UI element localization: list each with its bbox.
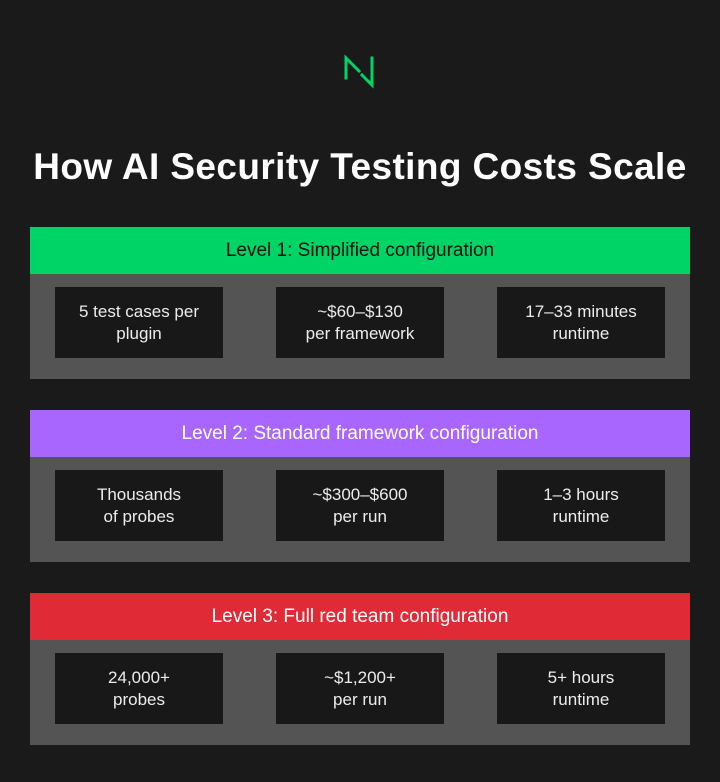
panel: level 2: [30, 410, 690, 562]
box: cost: ~$1,200+: [324, 668, 396, 686]
box: cost: per run: [333, 506, 387, 526]
box: probes: [55, 653, 223, 724]
box: probes: Thousands: [97, 484, 181, 504]
box: runtime: [497, 470, 665, 541]
box: cost: [276, 470, 444, 541]
box: cost: per run: [333, 690, 387, 708]
box: runtime: runtime: [553, 324, 609, 342]
box: probes: of probes: [104, 506, 174, 526]
level 3 header: Level 3: Full red team configuration: [212, 606, 508, 626]
level 1 header: [30, 227, 690, 274]
level 2 header: [30, 410, 690, 457]
box: probes: [55, 470, 223, 541]
box: runtime: 17–33 minutes: [525, 302, 637, 320]
level 1 body: [30, 274, 690, 379]
box: runtime: 1–3 hours: [543, 484, 619, 504]
box: test cases: [55, 287, 223, 358]
icon: logo: [344, 54, 374, 88]
level 3 body: [30, 640, 690, 745]
level 1 header: Level 1: Simplified configuration: [226, 240, 494, 260]
box: cost: [276, 287, 444, 358]
level 3 header: [30, 593, 690, 640]
box: runtime: [497, 653, 665, 724]
box: runtime: [497, 287, 665, 358]
title: How AI Security Testing Costs Scale: [33, 146, 687, 187]
box: cost: ~$300–$600: [312, 484, 408, 504]
box: probes: 24,000+: [108, 668, 170, 686]
box: probes: probes: [113, 690, 165, 708]
box: test cases: plugin: [116, 324, 162, 342]
box: cost: [276, 653, 444, 724]
box: cost: per framework: [306, 324, 414, 342]
box: runtime: runtime: [553, 506, 609, 526]
level 2 header: Level 2: Standard framework configuration: [182, 422, 538, 444]
panel: level 1: [30, 227, 690, 379]
box: cost: ~$60–$130: [317, 302, 403, 320]
box: runtime: 5+ hours: [548, 668, 614, 686]
panel: level 3: [30, 593, 690, 745]
level 2 body: [30, 457, 690, 562]
box: test cases: 5 test cases per: [79, 302, 199, 320]
box: runtime: runtime: [553, 690, 609, 708]
